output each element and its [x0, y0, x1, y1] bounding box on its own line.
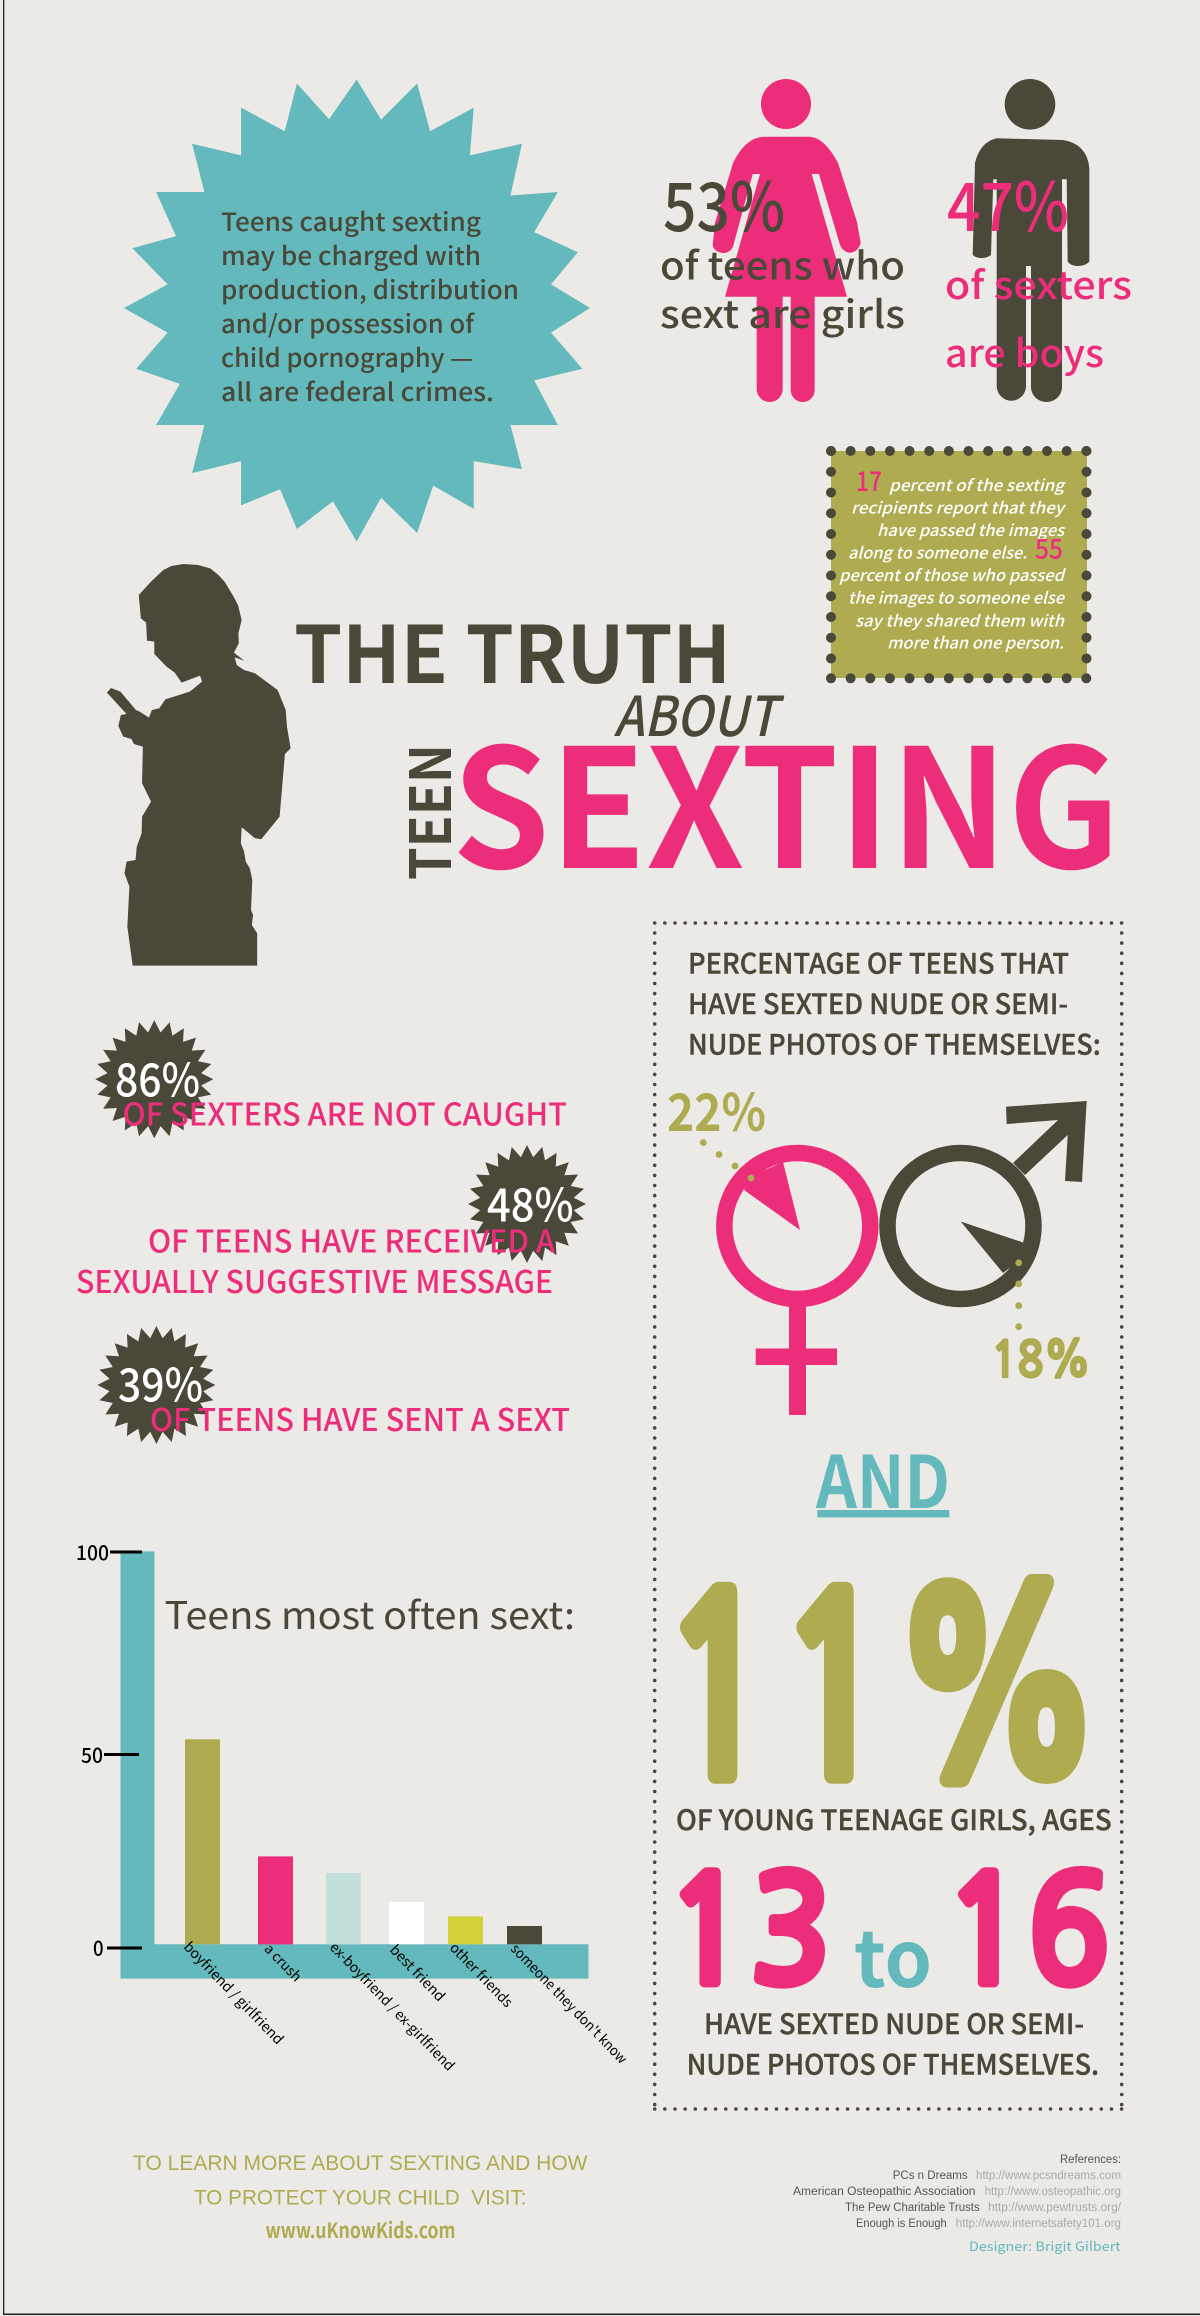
title: [294, 591, 1120, 916]
icon: female symbol pie: [724, 1153, 870, 1415]
text: learn more call to action: TO PROTECT YOUR CHILD VISIT:: [194, 2186, 526, 2210]
x axis labels: other friends: [445, 1938, 518, 2012]
title: SEXTING: [452, 677, 1120, 916]
stat: 48 percent received: 48%: [487, 1170, 574, 1236]
text: 53 percent girls: [660, 154, 905, 339]
text: have sexted: HAVE SEXTED NUDE OR SEMI-: [704, 2003, 1084, 2043]
text: references: PCs n Dreams: [893, 2170, 968, 2182]
y axis labels: [76, 1537, 109, 1962]
text: 53 percent girls: of teens who: [660, 236, 905, 290]
big numbers: 13 to 16: to: [854, 1898, 932, 2010]
big numbers: 13 to 16: [665, 1860, 1110, 2010]
callout: 18 percent: 18%: [991, 1337, 1091, 1385]
icon: teal starburst: [124, 79, 590, 541]
text: learn more call to action: www.uKnowKids.com: [266, 2215, 456, 2245]
text: legal warning: and/or possession of: [221, 305, 475, 341]
text: 47 percent boys: 47%: [947, 154, 1069, 251]
icon: male figure: [973, 79, 1089, 402]
text: box heading: [688, 942, 1101, 1064]
text: have sexted: [687, 2003, 1099, 2084]
text: references: http://www.osteopathic.org: [985, 2186, 1121, 2198]
text: stamp numbers: 17: [856, 460, 882, 499]
stat: 39 percent sent: [97, 1326, 570, 1444]
title: THE TRUTH: [294, 591, 731, 706]
text: references: http://www.internetsafety101.org: [956, 2218, 1121, 2230]
text: stamp numbers: 55: [1035, 527, 1063, 566]
stat: 48 percent received: SEXUALLY SUGGESTIVE MESSAGE: [76, 1257, 553, 1302]
panel: stamp callout: [831, 451, 1087, 678]
chart axes: [120, 1551, 588, 1979]
text: stamp copy: more than one person.: [887, 630, 1064, 654]
heading: AND: AND: [815, 1424, 950, 1529]
text: box heading: HAVE SEXTED NUDE OR SEMI-: [688, 983, 1068, 1023]
stat: 86 percent not caught: [95, 1020, 567, 1138]
stat: 39 percent sent: OF TEENS HAVE SENT A SEXT: [150, 1395, 570, 1440]
text: legal warning: all are federal crimes.: [221, 373, 494, 409]
bar chart: teens most often sext: [76, 1537, 632, 2075]
stat: 39 percent sent: 39%: [118, 1350, 203, 1416]
text: stamp numbers: [856, 460, 1063, 566]
stat: 86 percent not caught: OF SEXTERS ARE NOT CAUGHT: [122, 1090, 567, 1135]
text: learn more call to action: [133, 2152, 588, 2245]
text: references: [793, 2154, 1122, 2230]
title: TEEN: [386, 744, 468, 880]
text: 53 percent girls: sext are girls: [660, 284, 905, 339]
icon: teen silhouette with phone: [107, 564, 291, 966]
stat: 86 percent not caught: 86%: [115, 1045, 200, 1111]
text: 53 percent girls: 53%: [663, 154, 785, 251]
text: 47 percent boys: of sexters: [945, 255, 1132, 310]
y axis labels: 100: [76, 1537, 109, 1566]
text: stamp copy: say they shared them with: [855, 607, 1065, 631]
text: stamp copy: recipients report that they: [851, 494, 1066, 518]
text: designer credit: Designer: Brigit Gilbert: [969, 2236, 1121, 2255]
y axis labels: 50: [81, 1740, 103, 1768]
text: references: American Osteopathic Association: [793, 2186, 976, 2198]
title: ABOUT: [614, 672, 785, 752]
x axis labels: boyfriend / girlfriend: [179, 1937, 288, 2049]
icon: female figure: [713, 79, 861, 402]
x axis labels: [179, 1937, 632, 2075]
text: legal warning: may be charged with: [221, 237, 481, 273]
chart bars: [185, 1739, 542, 1944]
text: 47 percent boys: [945, 154, 1132, 378]
callout: 22 percent: 22%: [667, 1071, 766, 1146]
dotted border: [655, 923, 1122, 2109]
big numbers: 13 to 16: 16: [944, 1860, 1110, 2006]
text: stamp copy: percent of those who passed: [839, 562, 1066, 586]
chart ticks: [104, 1550, 142, 1950]
stat: 48 percent received: [76, 1145, 586, 1302]
text: stamp copy: the images to someone else: [848, 585, 1066, 609]
callout: 18 percent: [991, 1259, 1091, 1385]
text: of young teenage girls: OF YOUNG TEENAGE GIRLS, AGES: [676, 1799, 1112, 1839]
big numbers: 13 to 16: 13: [665, 1860, 833, 2006]
x axis labels: best friend: [385, 1940, 450, 2006]
y axis labels: 0: [93, 1933, 104, 1962]
text: have sexted: NUDE PHOTOS OF THEMSELVES.: [687, 2044, 1099, 2084]
text: stamp copy: [839, 472, 1067, 654]
stamp dots: [831, 451, 1087, 678]
chart title: Teens most often sext:: [164, 1585, 575, 1640]
panel: dotted box, percentage of teens: [655, 923, 1122, 2109]
x axis labels: ex-boyfriend / ex-girlfriend: [325, 1938, 459, 2075]
text: stamp copy: along to someone else.: [848, 539, 1027, 563]
text: box heading: PERCENTAGE OF TEENS THAT: [688, 942, 1069, 982]
text: learn more call to action: TO LEARN MORE ABOUT SEXTING AND HOW: [133, 2152, 588, 2175]
text: stamp copy: have passed the images: [877, 517, 1065, 541]
text: legal warning: production, distribution: [221, 271, 519, 307]
text: references: http://www.pcsndreams.com: [976, 2170, 1121, 2182]
x axis labels: someone they don't know: [506, 1939, 632, 2068]
text: legal warning: [221, 203, 519, 409]
text: references: The Pew Charitable Trusts: [845, 2202, 980, 2214]
icon: male symbol pie: [888, 1101, 1087, 1299]
text: legal warning: child pornography —: [221, 339, 473, 375]
text: stamp copy: percent of the sexting: [889, 472, 1067, 496]
text: references: Enough is Enough: [856, 2218, 947, 2230]
text: references: References:: [1060, 2154, 1121, 2166]
stat: 48 percent received: OF TEENS HAVE RECEIVED A: [148, 1216, 556, 1261]
panel: legal warning starburst: [124, 79, 590, 541]
callout: 22 percent: [667, 1071, 766, 1181]
text: references: http://www.pewtrusts.org/: [988, 2202, 1122, 2214]
text: 47 percent boys: are boys: [945, 323, 1104, 378]
x axis labels: a crush: [260, 1939, 306, 1986]
text: legal warning: Teens caught sexting: [221, 203, 482, 239]
text: box heading: NUDE PHOTOS OF THEMSELVES:: [688, 1024, 1101, 1064]
